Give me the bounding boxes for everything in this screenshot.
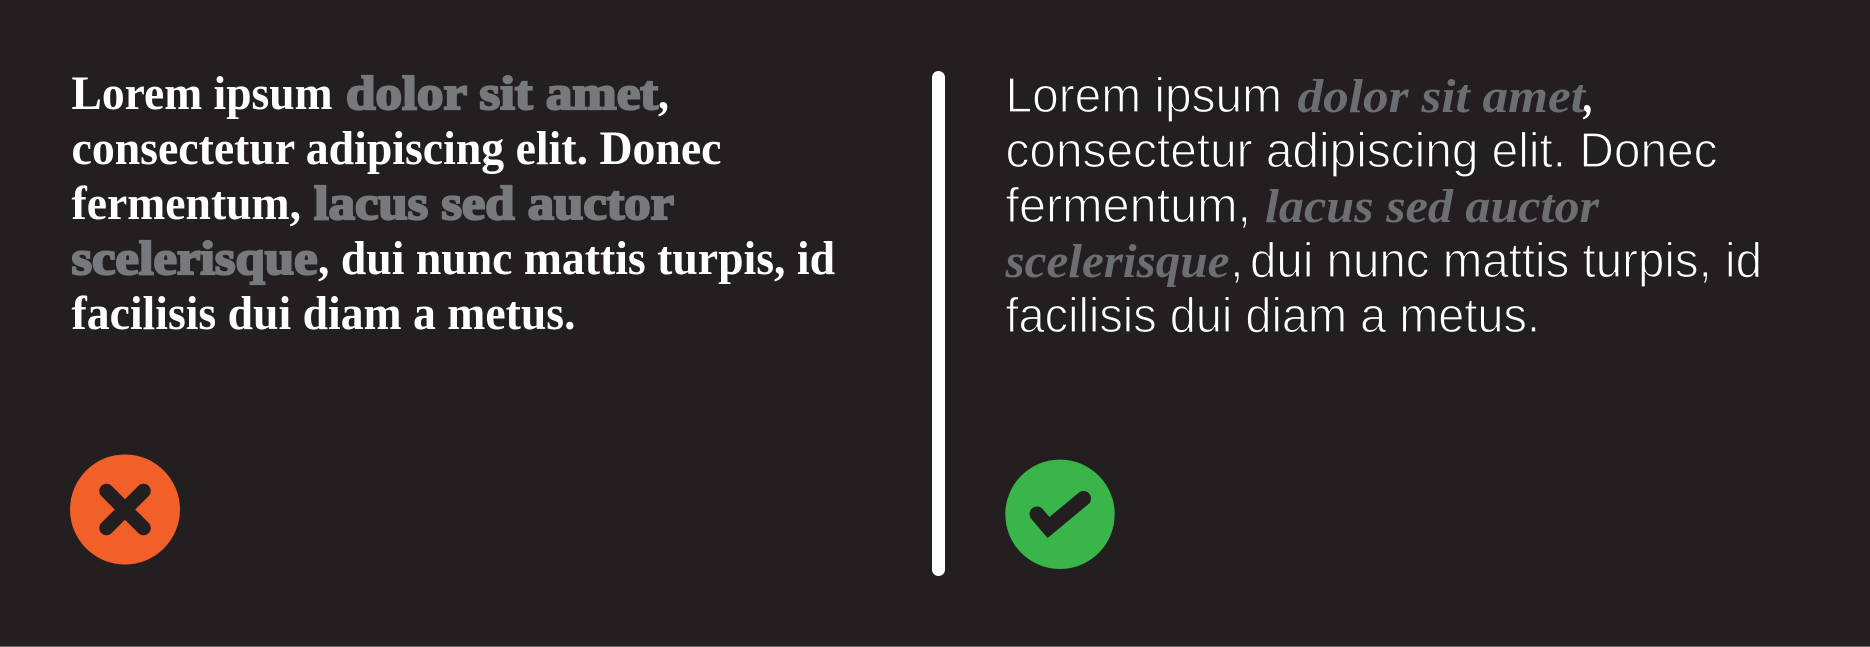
text block: serif paragraph with heavy highlights: , dui nunc mattis turpis, id: [318, 232, 835, 285]
text block: light sans paragraph with italic serif highlights: ,: [1230, 234, 1244, 288]
icon: orange cross: [70, 454, 180, 564]
text block: serif paragraph with heavy highlights: consectetur adipiscing elit. Donec: [72, 122, 722, 175]
text block: light sans paragraph with italic serif highlights: Lorem ipsum: [1006, 69, 1282, 123]
text block: light sans paragraph with italic serif highlights: dolor sit amet: [1298, 70, 1587, 123]
divider: vertical white bar: [932, 71, 945, 576]
panel: good example: [1004, 69, 1762, 569]
text block: serif paragraph with heavy highlights: fermentum,: [72, 177, 301, 230]
text block: serif paragraph with heavy highlights: ,: [658, 67, 669, 120]
panel: bad example: [70, 67, 835, 564]
icon: green check: [1005, 460, 1115, 569]
text block: serif paragraph with heavy highlights: scelerisque: [72, 232, 318, 285]
text block: light sans paragraph with italic serif highlights: consectetur adipiscing elit. Donec: [1006, 124, 1718, 178]
text block: serif paragraph with heavy highlights: lacus sed auctor: [314, 177, 674, 230]
text block: serif paragraph with heavy highlights: facilisis dui diam a metus.: [72, 287, 576, 340]
text block: light sans paragraph with italic serif highlights: lacus sed auctor: [1265, 180, 1600, 233]
text block: light sans paragraph with italic serif highlights: scelerisque: [1004, 235, 1230, 288]
text block: light sans paragraph with italic serif highlights: [1004, 69, 1762, 343]
text block: serif paragraph with heavy highlights: Lorem ipsum: [72, 67, 333, 120]
text block: light sans paragraph with italic serif highlights: fermentum,: [1006, 179, 1251, 233]
text block: serif paragraph with heavy highlights: dolor sit amet: [346, 67, 658, 120]
text block: light sans paragraph with italic serif highlights: dui nunc mattis turpis, id: [1250, 234, 1762, 288]
text block: light sans paragraph with italic serif highlights: ,: [1582, 70, 1594, 123]
text block: serif paragraph with heavy highlights: [72, 67, 835, 340]
text block: light sans paragraph with italic serif highlights: facilisis dui diam a metus.: [1006, 289, 1540, 343]
